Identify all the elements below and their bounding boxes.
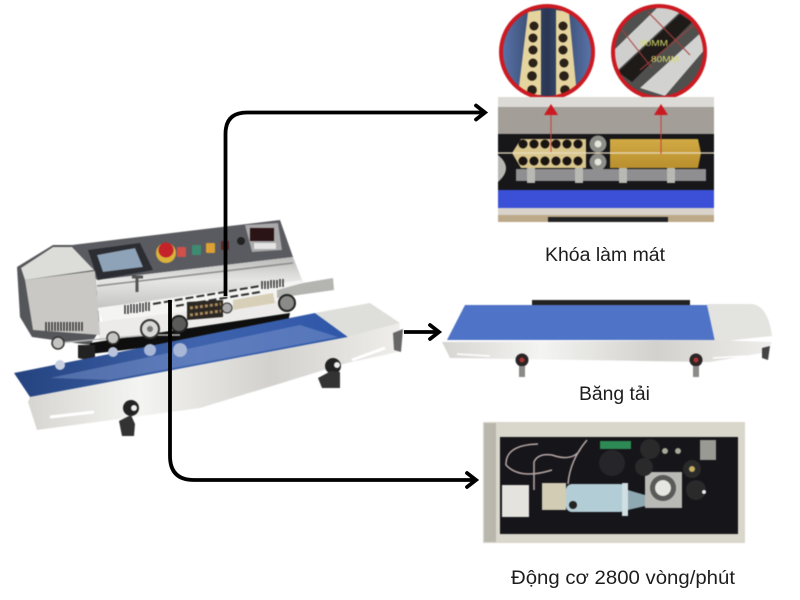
vents and heating block — [153, 286, 275, 320]
zoom circle: 80mm seal width: 80MM — [651, 55, 679, 64]
arrow: machine to motor — [170, 300, 476, 487]
rail right — [277, 278, 334, 298]
arrow: machine to cooling block — [226, 106, 485, 296]
zoom circle: 80mm seal width: 80MM — [640, 39, 668, 48]
label: conveyor: Băng tải — [579, 384, 650, 405]
conveyor knobs — [516, 354, 702, 377]
top ledge strip — [97, 263, 293, 286]
machine body — [17, 220, 334, 362]
clamp bolt — [136, 277, 138, 292]
label: motor: Động cơ 2800 vòng/phút — [511, 568, 736, 589]
zoom circle: cooling holes — [500, 5, 594, 99]
conveyor belt — [14, 303, 403, 430]
label: cooling block: Khóa làm mát — [545, 245, 666, 266]
arrow: machine to conveyor — [404, 325, 439, 339]
touch screen — [88, 243, 153, 280]
adjustment knobs — [119, 358, 341, 436]
gearbox — [645, 472, 682, 508]
rollers and gears — [52, 295, 295, 349]
transformer — [502, 485, 529, 517]
panel: motor compartment photo — [483, 422, 745, 543]
control buttons — [156, 223, 282, 263]
main machine: band sealer — [14, 220, 403, 436]
panel: conveyor photo — [442, 300, 772, 377]
panel: cooling block photo — [498, 5, 714, 222]
gears and wiring — [506, 439, 716, 500]
photo: sealing block — [498, 97, 714, 222]
red callout arrows — [544, 104, 668, 154]
motor body — [566, 483, 645, 516]
vent slots — [46, 322, 82, 331]
power supply — [542, 483, 566, 510]
zoom circle: 80mm seal width — [612, 5, 706, 99]
